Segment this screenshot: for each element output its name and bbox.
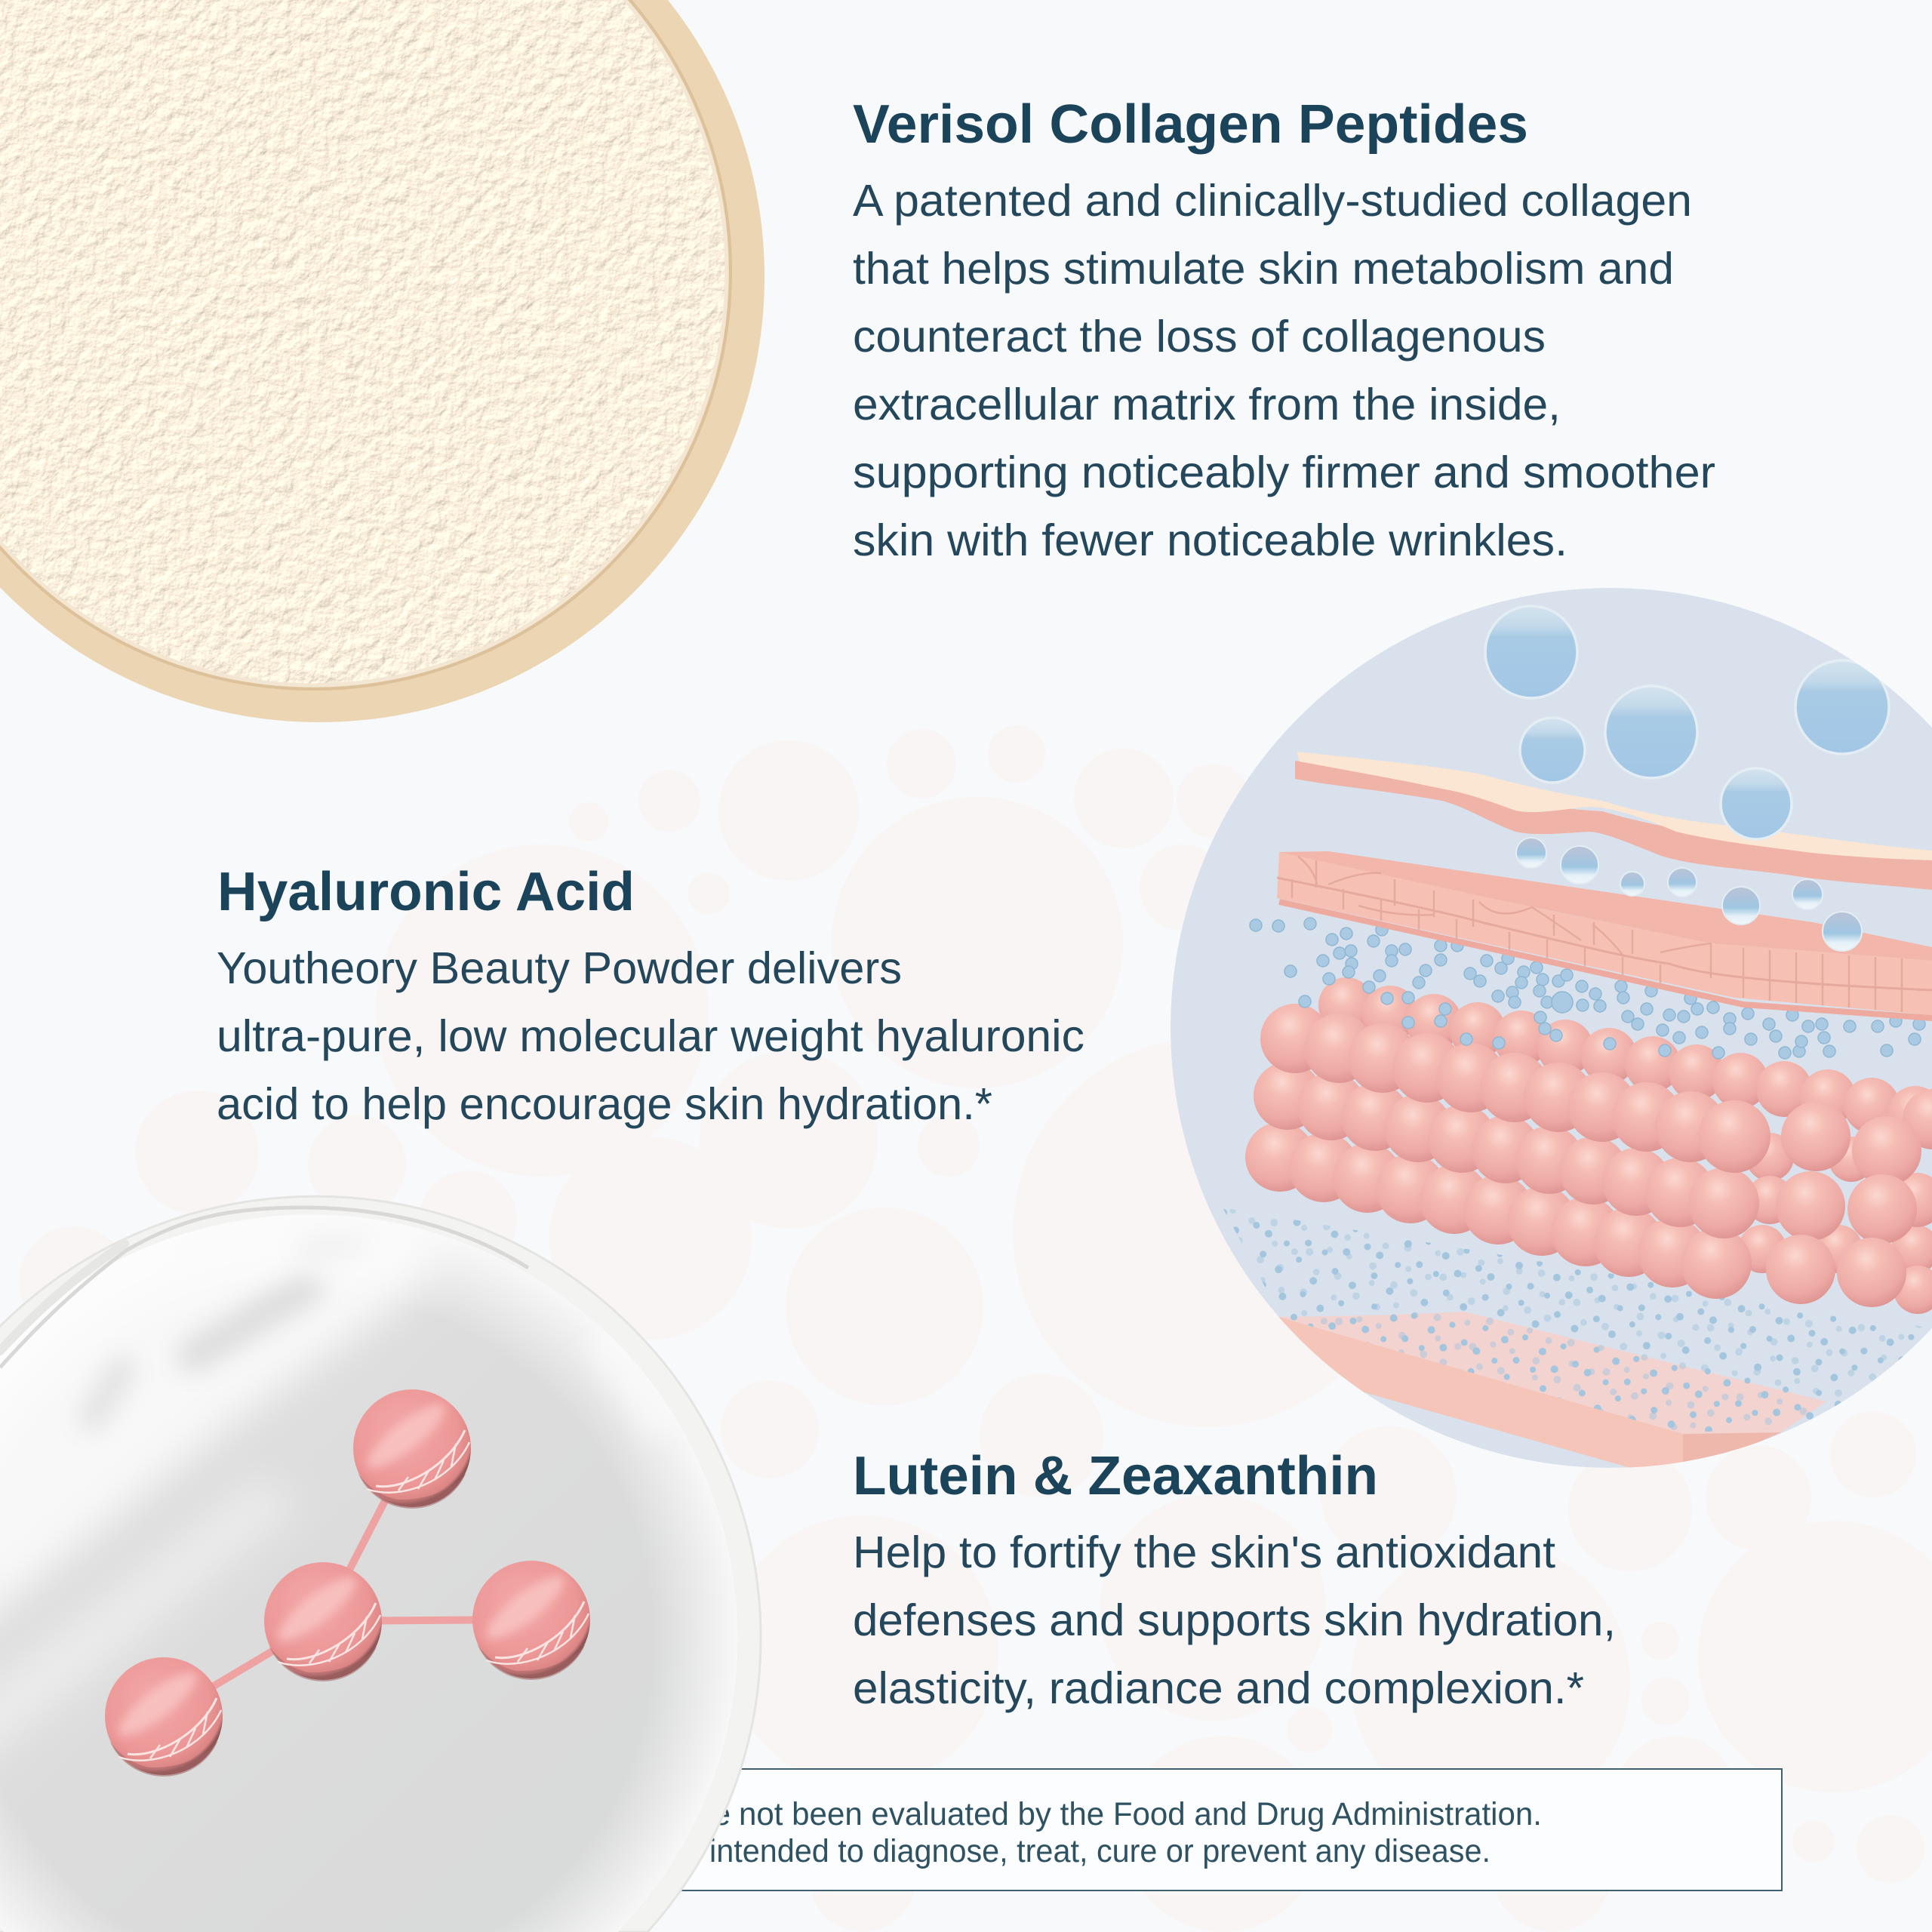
heading: Lutein and Zeaxanthin: Lutein & Zeaxanthin [853, 1446, 1378, 1506]
text block: Verisol description: counteract the loss of collagenous [853, 312, 1546, 361]
decorative background bubbles [19, 725, 1932, 1932]
text block: Lutein description: defenses and supports skin hydration, [853, 1595, 1616, 1645]
text block: Hyaluronic description: ultra-pure, low molecular weight hyaluronic [217, 1011, 1084, 1061]
disclaimer box: intended to diagnose, treat, cure or prevent any disease. [709, 1833, 1491, 1869]
image: glass dish with molecule [0, 1196, 761, 1932]
translucent base plane [1253, 1312, 1826, 1434]
molecule [105, 1389, 590, 1777]
text block: Lutein description: Help to fortify the skin's antioxidant [853, 1527, 1555, 1577]
disclaimer box: These statements have [393, 1796, 731, 1832]
text block: Verisol description: skin with fewer noticeable wrinkles. [853, 515, 1567, 565]
image: skin layers illustration [1171, 588, 1932, 1472]
heading: Hyaluronic Acid: Hyaluronic Acid [217, 862, 635, 922]
disclaimer box: not been evaluated by the Food and Drug Administration. [739, 1796, 1542, 1832]
disclaimer box [393, 1769, 1782, 1890]
text block: Lutein description [853, 1527, 1616, 1713]
top skin membrane [1295, 752, 1932, 890]
disclaimer box: This product is not [435, 1833, 700, 1869]
text block: Verisol description: extracellular matrix from the inside, [853, 380, 1561, 429]
mid-skin cell slab [1277, 851, 1932, 1018]
text block: Verisol description [853, 176, 1715, 565]
dish rim [0, 1208, 528, 1367]
cell spheres [1245, 977, 1932, 1314]
text block: Lutein description: elasticity, radiance and complexion.* [853, 1663, 1584, 1713]
text block: Hyaluronic description: Youtheory Beauty Powder delivers [217, 943, 902, 993]
image: collagen powder in tan dish [0, 0, 764, 722]
heading: Verisol Collagen Peptides: Verisol Collagen Peptides [853, 94, 1528, 155]
text block: Hyaluronic description: acid to help encourage skin hydration.* [217, 1079, 992, 1129]
water droplets [1485, 606, 1889, 951]
text block: Hyaluronic description [217, 943, 1084, 1129]
base membrane front face [1278, 1317, 1781, 1467]
mist droplets lower band [1223, 1208, 1932, 1434]
text block: Verisol description: supporting noticeably firmer and smoother [853, 448, 1715, 497]
dish reflections [0, 1232, 423, 1617]
text block: Verisol description: A patented and clinically-studied collagen [853, 176, 1692, 226]
mist droplets upper band [1250, 918, 1925, 1059]
text block: Verisol description: that helps stimulate skin metabolism and [853, 244, 1674, 294]
